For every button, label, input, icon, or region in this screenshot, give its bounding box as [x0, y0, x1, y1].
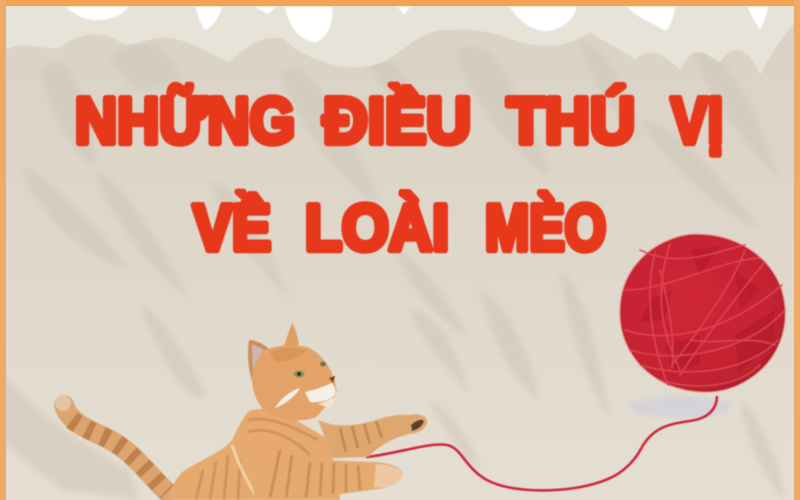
- title: VỀ: [193, 191, 271, 264]
- illustration: orange tabby cat playing: [55, 323, 427, 500]
- cat tail: [55, 395, 167, 492]
- title: LOÀI: [305, 191, 449, 264]
- title: [75, 84, 723, 264]
- title: MÈO: [485, 191, 606, 264]
- cat body: [168, 408, 340, 500]
- yarn shadow: [628, 396, 732, 418]
- cat upper arm: [318, 414, 427, 458]
- cat head: [248, 323, 380, 420]
- cat lower arm: [245, 437, 403, 500]
- title: NHỮNG: [75, 84, 295, 157]
- icon: red yarn ball: [620, 234, 785, 392]
- title: VỊ: [671, 84, 723, 157]
- top white drips: [6, 6, 794, 75]
- title: ĐIỀU: [323, 84, 471, 157]
- title: THÚ: [507, 84, 635, 157]
- string of yarn: [367, 397, 717, 490]
